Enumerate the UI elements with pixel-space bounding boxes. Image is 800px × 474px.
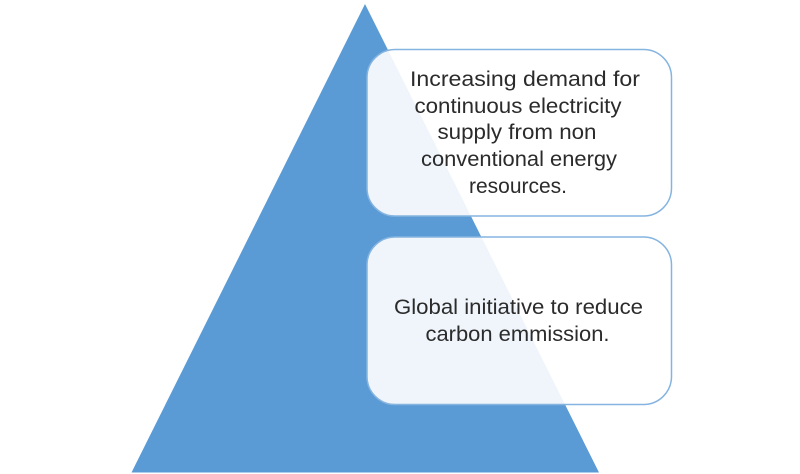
text: carbon emission driver	[394, 296, 643, 346]
text: electricity demand driver	[410, 68, 640, 198]
text: carbon emission driver: carbon emmission.	[426, 323, 610, 346]
pyramid triangle	[132, 4, 599, 472]
panel: carbon emission driver	[367, 237, 672, 404]
panel: electricity demand driver	[367, 50, 672, 216]
text: electricity demand driver: Increasing demand for	[410, 68, 640, 91]
rounded card: electricity demand	[367, 50, 672, 216]
text: electricity demand driver: conventional energy	[421, 148, 618, 171]
text: electricity demand driver: resources.	[469, 175, 567, 198]
text: electricity demand driver: supply from non	[438, 121, 596, 144]
rounded card: carbon emission	[367, 237, 672, 404]
text: carbon emission driver: Global initiative to reduce	[394, 296, 643, 319]
text: electricity demand driver: continuous electricity	[414, 95, 622, 118]
